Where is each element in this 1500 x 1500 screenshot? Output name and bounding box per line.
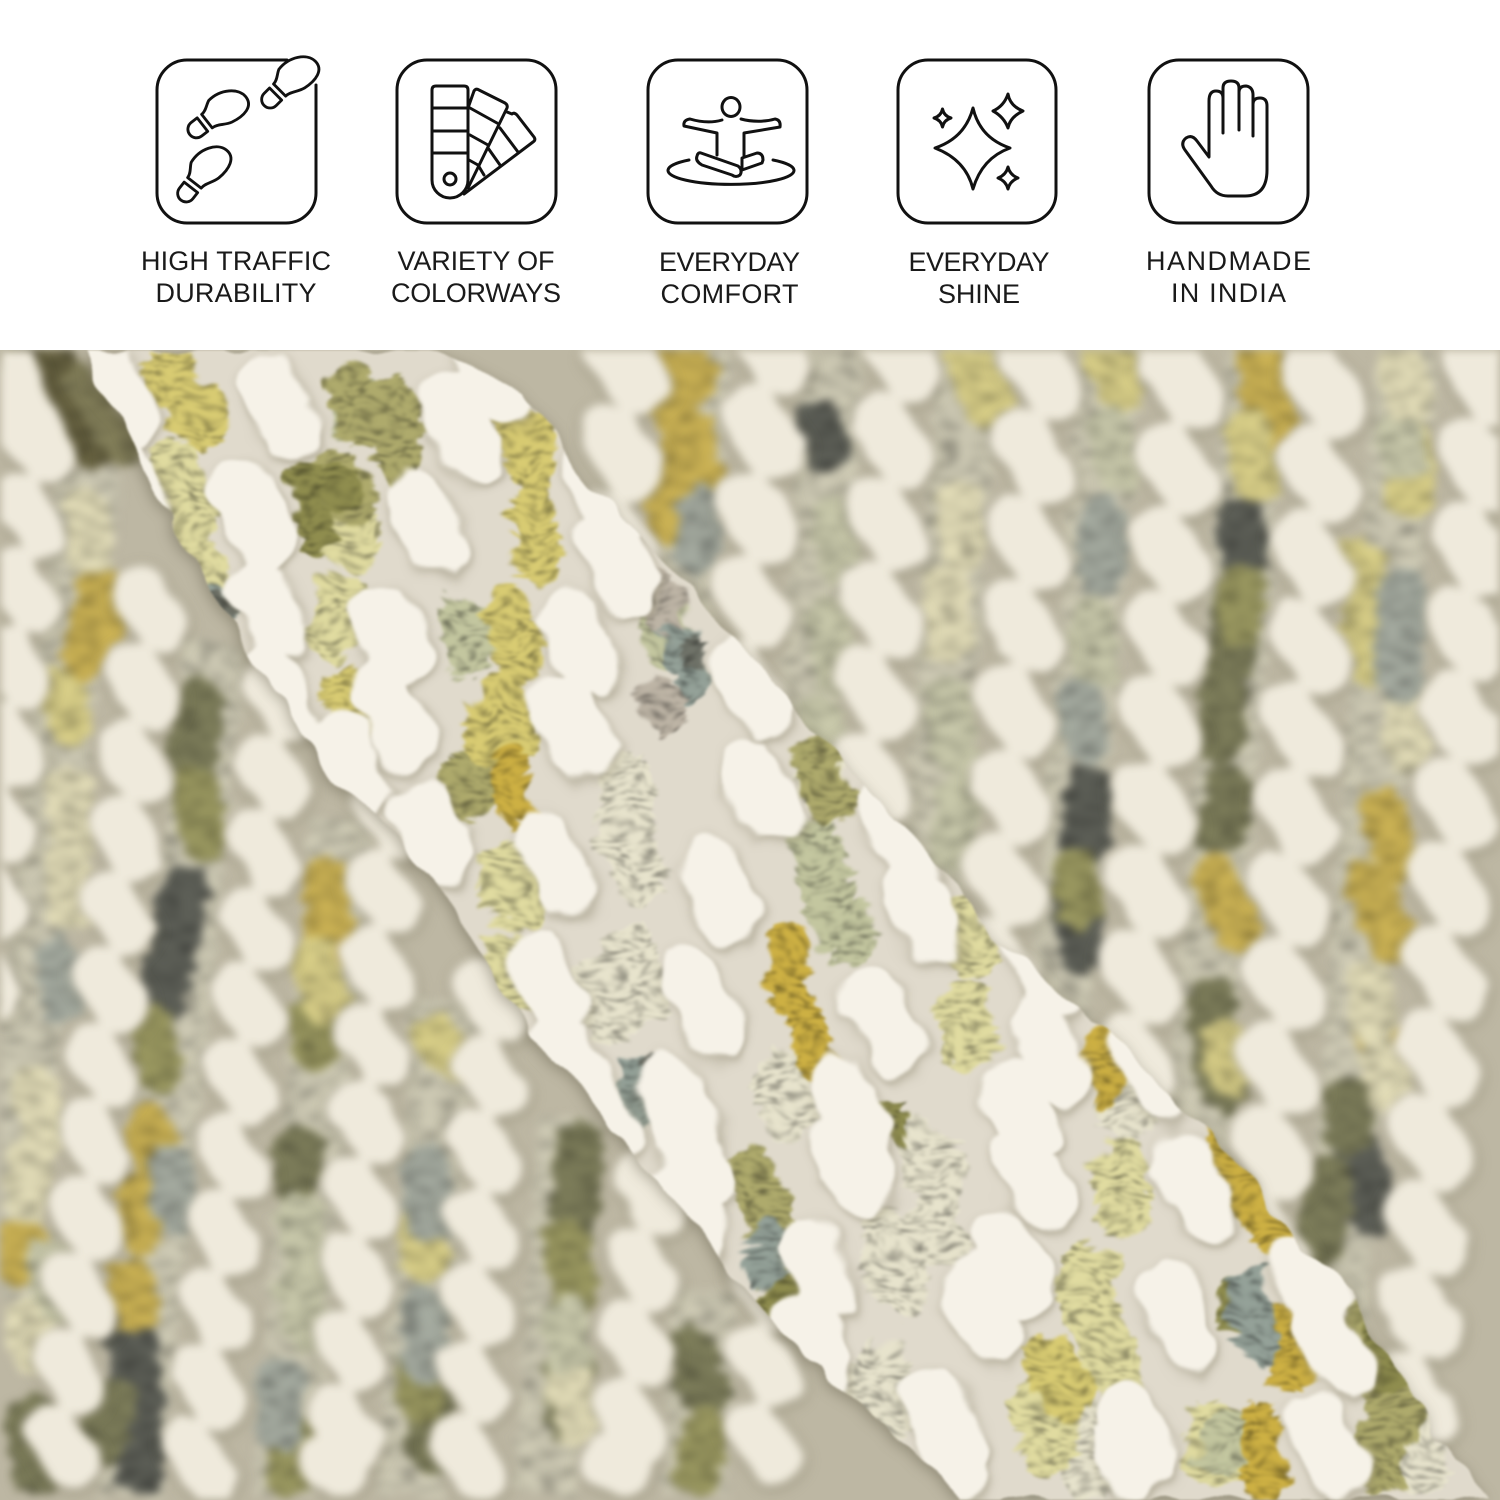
label: variety of colorways: VARIETY OF (398, 246, 554, 276)
label: variety of colorways: COLORWAYS (391, 278, 561, 308)
label: everyday shine: EVERYDAY (908, 247, 1050, 277)
feature: everyday shine (898, 60, 1056, 309)
icon: sparkles (898, 60, 1056, 223)
label: high traffic durability: DURABILITY (156, 278, 316, 308)
icon: meditating figure (648, 60, 807, 223)
label: everyday comfort: EVERYDAY (659, 247, 800, 277)
label: variety of colorways (391, 246, 561, 308)
panel: wool rug close-up photo illustration (0, 330, 1500, 1500)
label: handmade in india: HANDMADE (1146, 246, 1311, 276)
label: everyday comfort: COMFORT (660, 279, 798, 309)
background rug: coloured yarn knots (0, 350, 1413, 1497)
background rug: white wool stitch columns (0, 330, 1500, 1477)
feature: variety of colorways (391, 60, 561, 308)
feature: handmade in india (1146, 60, 1311, 308)
icon: colour swatch fan (397, 60, 556, 223)
feature: high traffic durability (141, 47, 331, 308)
label: everyday comfort (659, 247, 800, 309)
label: high traffic durability: HIGH TRAFFIC (141, 246, 331, 276)
label: handmade in india (1146, 246, 1311, 308)
icon: footprints (157, 47, 324, 223)
diagonal fold of the rug (0, 347, 1500, 1500)
label: everyday shine (908, 247, 1050, 309)
label: everyday shine: SHINE (938, 279, 1020, 309)
label: high traffic durability (141, 246, 331, 308)
label: handmade in india: IN INDIA (1171, 278, 1286, 308)
icon: hand (1149, 60, 1308, 223)
fold: white wool stitches (105, 347, 1345, 1470)
fold: coloured yarn knots (170, 375, 1420, 1478)
feature: everyday comfort (648, 60, 807, 309)
panel: feature icons row (141, 47, 1311, 309)
